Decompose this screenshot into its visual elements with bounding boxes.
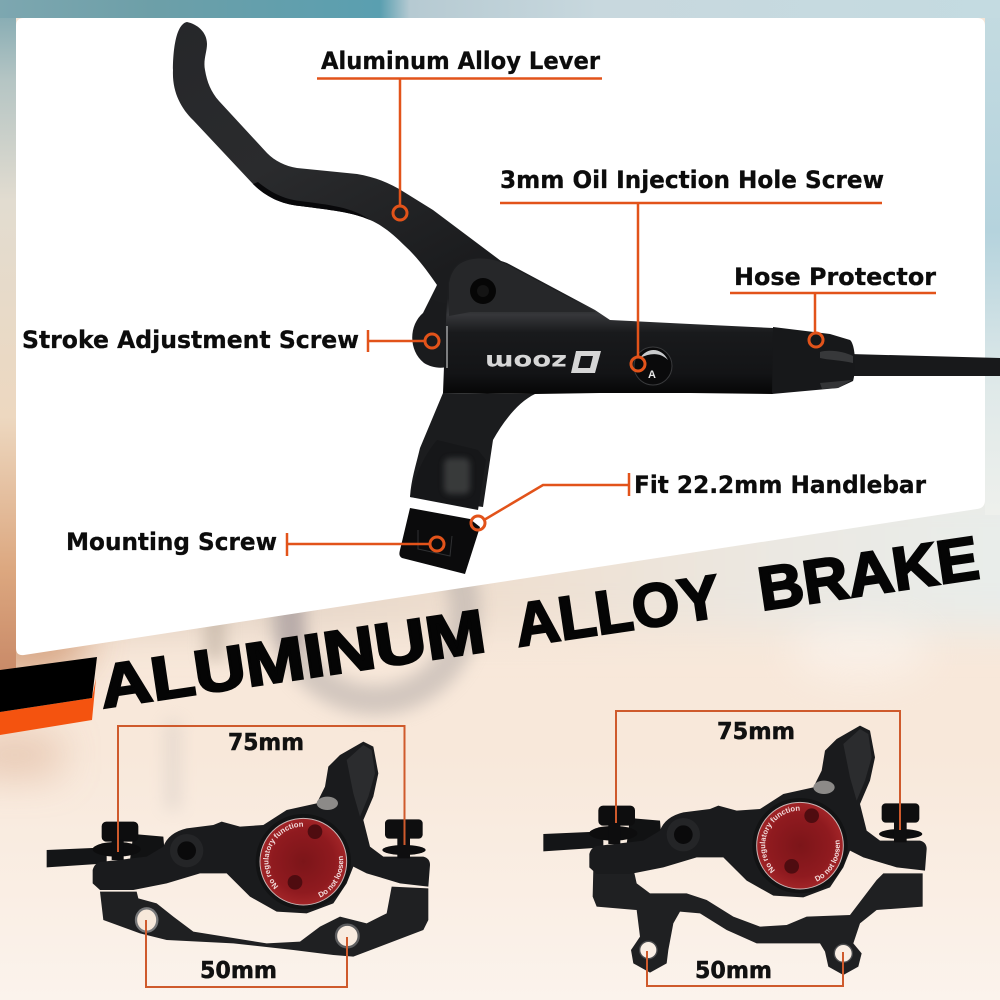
callout: Hose Protector: Hose Protector <box>734 263 936 291</box>
bolts <box>589 803 922 844</box>
hose <box>850 354 1000 376</box>
red cap: Do not loosen <box>814 840 840 882</box>
measure: 75mm right <box>616 711 900 830</box>
callout: 3mm Oil Injection Hole Screw <box>500 166 884 371</box>
title: BRAKE <box>754 524 983 623</box>
lower arm <box>410 393 535 507</box>
bolts <box>93 819 426 860</box>
callout: Mounting Screw <box>66 528 444 556</box>
oil screw: A <box>648 369 656 381</box>
title <box>95 524 983 721</box>
lever underside shadow <box>253 182 370 220</box>
white product panel <box>16 18 985 655</box>
red cap: Do not loosen <box>318 856 344 898</box>
body edge highlight <box>446 326 448 368</box>
callout: Stroke Adjustment Screw: Stroke Adjustment Screw <box>22 326 359 354</box>
caliper: right <box>543 710 927 987</box>
title: ALLOY <box>510 562 724 659</box>
callout: 3mm Oil Injection Hole Screw: 3mm Oil Injection Hole Screw <box>500 166 884 194</box>
clamp barrel <box>410 440 486 510</box>
lever blade <box>173 22 505 310</box>
measure: 75mm left <box>118 726 404 852</box>
measure: 50mm left: 50mm <box>200 958 277 984</box>
pivot screw <box>470 278 496 304</box>
mounting holes <box>640 941 852 962</box>
stripe: black and orange banner <box>0 657 97 735</box>
measure: 75mm left: 75mm <box>228 730 304 756</box>
caliper: left <box>46 725 430 988</box>
mounting bracket: right <box>593 868 923 975</box>
master cylinder body <box>443 257 773 394</box>
clamp block <box>399 508 480 574</box>
logo: zoom <box>485 350 567 374</box>
banjo bolt <box>667 818 700 851</box>
title: ALUMINUM <box>95 597 490 721</box>
measure: 50mm right: 50mm <box>695 958 772 984</box>
callout: Fit 22.2mm Handlebar: Fit 22.2mm Handlebar <box>634 471 926 499</box>
stroke adjustment knob <box>412 285 450 368</box>
caliper body: right <box>543 726 927 898</box>
callout: Aluminum Alloy Lever: Aluminum Alloy Lever <box>321 47 600 75</box>
red cap: No regulatory function <box>760 806 800 874</box>
brake lever <box>173 22 1000 574</box>
mounting bracket: left <box>100 887 428 957</box>
callout: Hose Protector <box>730 263 936 347</box>
red cap: No regulatory function <box>263 822 304 890</box>
callout: Aluminum Alloy Lever <box>317 47 602 220</box>
callout: Fit 22.2mm Handlebar <box>471 471 926 530</box>
measure: 50mm left <box>146 920 347 987</box>
measure: 75mm right: 75mm <box>717 719 795 745</box>
callout: Mounting Screw: Mounting Screw <box>66 528 277 556</box>
caliper body: left <box>47 742 430 913</box>
oil screw <box>634 347 672 385</box>
hose protector <box>772 327 855 394</box>
banjo bolt <box>170 834 203 867</box>
pivot housing <box>449 258 596 316</box>
mounting holes <box>136 908 359 947</box>
red cap <box>256 814 351 909</box>
red cap <box>752 798 848 893</box>
measure: 50mm right <box>647 951 843 986</box>
logo <box>485 350 601 374</box>
